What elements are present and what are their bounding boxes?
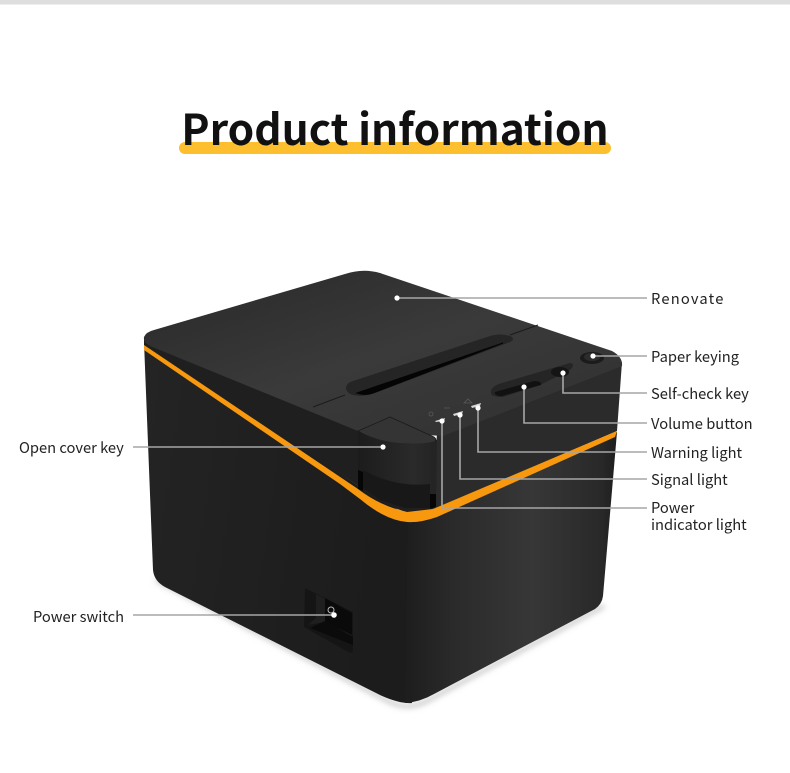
- title text: Product information: [181, 97, 609, 158]
- left skirt above orange line: [144, 338, 437, 513]
- callout: Volume button: Volume button: [651, 413, 753, 434]
- indicator icons: [429, 399, 472, 416]
- lid seam: [313, 325, 538, 407]
- title: [179, 97, 611, 158]
- paper slot: [346, 334, 513, 396]
- callout: Open cover key: [19, 437, 386, 458]
- callout: Signal light: [457, 412, 728, 490]
- title underline: [179, 142, 611, 154]
- callout: Power indicator light: Power: [651, 497, 695, 518]
- callout: Warning light: Warning light: [651, 442, 743, 463]
- callout: Signal light: Signal light: [651, 469, 728, 490]
- left body face: [144, 342, 412, 703]
- ground shadow: [156, 580, 604, 706]
- orange accent line: [144, 345, 617, 522]
- self-check key: [551, 367, 569, 377]
- open cover key: [358, 417, 437, 509]
- callout: Renovate: Renovate: [651, 288, 725, 309]
- power switch: [304, 588, 353, 653]
- right body face: [405, 432, 617, 703]
- callout: Volume button: [521, 384, 753, 434]
- right skirt above orange line: [430, 362, 622, 511]
- printer illustration: [144, 271, 622, 706]
- callout: Power indicator light: [439, 418, 747, 535]
- callout: Open cover key: Open cover key: [19, 437, 124, 458]
- callout: Renovate: [394, 288, 725, 309]
- callout: Power switch: Power switch: [33, 606, 124, 627]
- top surface: [144, 271, 622, 436]
- indicator lights: [435, 403, 481, 422]
- callout: Self-check key: [560, 370, 749, 404]
- callout: Power indicator light: indicator light: [651, 514, 747, 535]
- callout: Paper keying: Paper keying: [651, 346, 740, 367]
- paper feed key: [580, 352, 604, 364]
- callout: Power switch: [33, 606, 337, 627]
- callout: Self-check key: Self-check key: [651, 383, 749, 404]
- top grey band: [0, 0, 790, 4]
- callout: Warning light: [475, 405, 743, 463]
- volume button: [491, 363, 573, 397]
- callout: Paper keying: [590, 346, 740, 367]
